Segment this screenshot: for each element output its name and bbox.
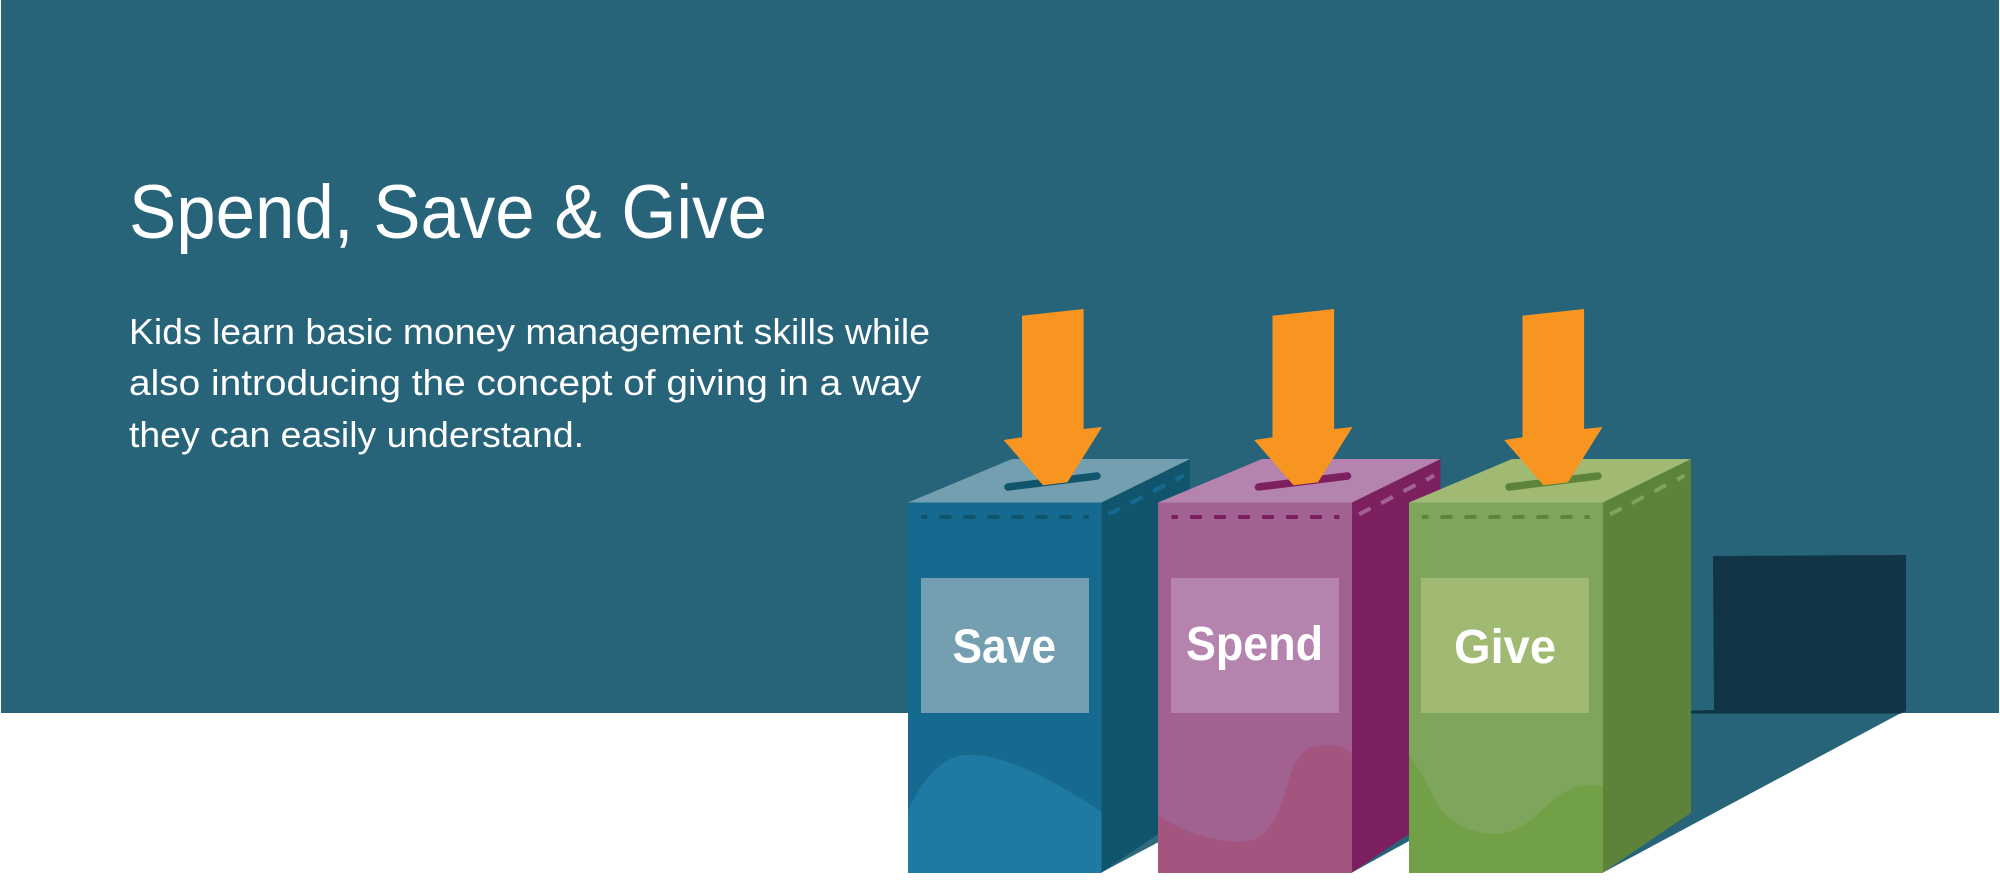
save box side face [1102,459,1190,872]
give box side face [1603,459,1691,872]
intro paragraph: they can easily understand. [129,414,584,455]
title: Spend, Save & Give [129,170,767,255]
save box wave [908,755,1102,873]
box: give [1409,309,1691,873]
intro paragraph [129,311,930,455]
save box top face [908,459,1190,502]
give box front face [1409,502,1603,873]
spend box side face [1352,459,1440,872]
give side dashes [1610,475,1684,514]
save label text: Save [952,620,1056,674]
spend box wave [1158,745,1352,873]
give box top face [1409,459,1691,502]
spend front dashes [1172,515,1340,519]
give label panel [1421,578,1589,713]
intro paragraph: also introducing the concept of giving in a way [129,362,921,403]
give label text: Give [1454,621,1556,674]
save arrow [1004,309,1102,485]
spend slot [1258,476,1348,487]
box: spend [1158,309,1440,873]
save box front face [908,502,1102,873]
save front dashes [921,515,1089,519]
spend arrow [1254,309,1352,485]
box: save [908,309,1190,873]
spend box top face [1158,459,1440,502]
give arrow [1504,309,1602,485]
intro paragraph: Kids learn basic money management skills while [129,311,930,352]
spend label text: Spend [1186,618,1323,671]
floor shadow [1090,713,1901,872]
spend side dashes [1359,475,1434,514]
give slot [1509,476,1598,487]
spend label panel [1171,578,1339,713]
dark wall shadow [1691,555,1906,714]
spend box front face [1158,502,1352,873]
save slot [1008,476,1097,487]
save label panel [921,578,1089,713]
give front dashes [1422,515,1590,519]
give box wave [1409,755,1603,873]
save side dashes [1109,475,1184,514]
